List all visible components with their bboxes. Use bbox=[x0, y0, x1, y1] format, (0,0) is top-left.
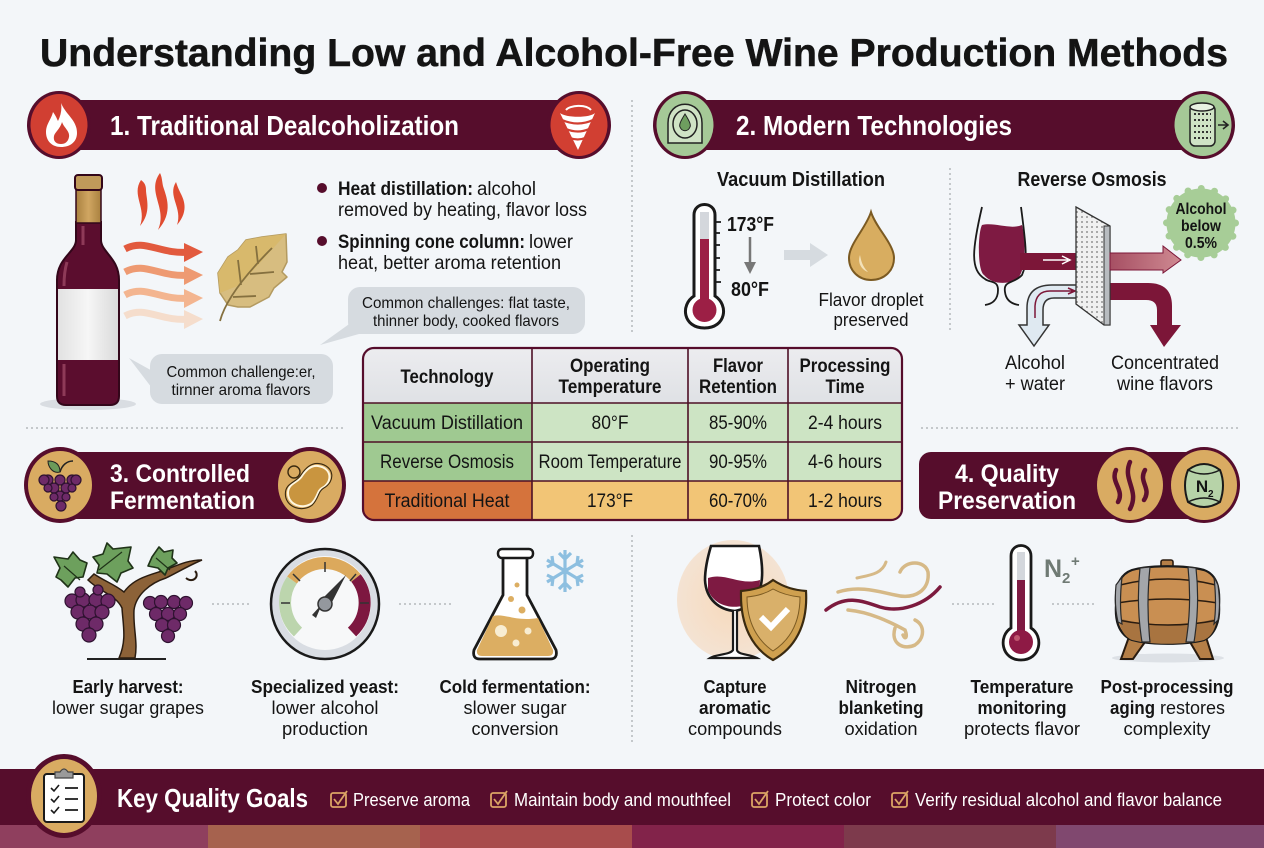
row: traditional heat: 1-2 hours bbox=[808, 491, 882, 512]
text: flavor droplet preserved: preserved bbox=[834, 310, 908, 330]
text: spinning cone column: Spinning cone column: bbox=[338, 232, 525, 253]
goal: protect color: Protect color bbox=[775, 790, 871, 810]
arrow: to droplet bbox=[784, 243, 828, 267]
text: specialized yeast: Specialized yeast: bbox=[251, 677, 399, 697]
text: specialized yeast: production bbox=[282, 719, 368, 739]
heading 3 banner bbox=[24, 447, 346, 523]
callout: common challenges: Common challenges: flat taste, bbox=[362, 295, 570, 312]
text: temperature monitoring: monitoring bbox=[978, 698, 1066, 718]
icon: nitrogen wind bbox=[826, 562, 940, 647]
icon: heat wave arrows bbox=[125, 243, 203, 329]
heading 3 banner: Fermentation bbox=[110, 487, 255, 515]
icon: flavor droplet bbox=[849, 212, 894, 280]
text: post-processing aging: restores bbox=[1160, 698, 1225, 718]
icon: thermometer 173 to 80: 80°F bbox=[731, 279, 769, 301]
arrow: concentrated wine flavors bbox=[1108, 283, 1181, 347]
arrow: wine into membrane bbox=[1020, 246, 1094, 275]
text: early harvest: lower sugar grapes bbox=[52, 698, 204, 718]
icon: temperature monitor: N bbox=[1044, 555, 1062, 583]
heading: vacuum distillation: Vacuum Distillation bbox=[717, 169, 885, 191]
badge: alcohol below 0.5% bbox=[1166, 188, 1236, 258]
text: flavor droplet preserved bbox=[818, 290, 924, 330]
text: nitrogen blanketing: blanketing bbox=[838, 698, 924, 718]
heading 4 banner bbox=[919, 447, 1240, 523]
text: nitrogen blanketing bbox=[838, 677, 924, 739]
icon: dry leaf bbox=[218, 234, 287, 321]
text: cold fermentation: Cold fermentation: bbox=[440, 677, 590, 697]
panel: traditional dealcoholization bbox=[27, 91, 611, 410]
callout: common challenges bbox=[320, 287, 585, 345]
row: vacuum distillation: Vacuum Distillation bbox=[371, 413, 523, 434]
heading 1 banner: 1. Traditional Dealcoholization bbox=[110, 110, 459, 141]
row: traditional heat: 60-70% bbox=[709, 491, 767, 512]
icon: fermentation flask bbox=[474, 549, 556, 659]
text: early harvest bbox=[52, 677, 204, 718]
text: post-processing aging: complexity bbox=[1124, 719, 1210, 739]
goal: preserve aroma: Preserve aroma bbox=[353, 790, 471, 810]
icon: clipboard bbox=[26, 754, 102, 838]
text: capture aromatic compounds: compounds bbox=[688, 719, 782, 739]
badge: alcohol below 0.5%: Alcohol bbox=[1176, 201, 1226, 218]
text: flavor droplet preserved: Flavor droplet bbox=[818, 290, 924, 310]
row: reverse osmosis: Room Temperature bbox=[538, 452, 682, 473]
text: concentrated wine flavors bbox=[1111, 353, 1219, 395]
text: spinning cone column: lower bbox=[529, 232, 574, 253]
panel: key quality goals bbox=[0, 754, 1264, 848]
icon: temperature monitor: + bbox=[1071, 553, 1080, 570]
heading 1 banner bbox=[27, 91, 611, 159]
heading 4 banner: 2 bbox=[1208, 489, 1214, 500]
text: temperature monitoring: Temperature bbox=[970, 677, 1074, 697]
text: spinning cone column: heat, better aroma retention bbox=[338, 253, 561, 274]
footer band bbox=[0, 769, 1264, 825]
row: reverse osmosis: 90-95% bbox=[709, 452, 767, 473]
panel: quality preservation bbox=[677, 447, 1240, 739]
badge: alcohol below 0.5%: 0.5% bbox=[1185, 235, 1217, 252]
heading 4 banner: Preservation bbox=[938, 487, 1076, 515]
title: Understanding Low and Alcohol-Free Wine Production Methods bbox=[40, 32, 1228, 75]
text: specialized yeast bbox=[251, 677, 399, 739]
goal: verify residual alcohol: Verify residual alcohol and flavor balance bbox=[915, 790, 1222, 810]
text: heat distillation bbox=[317, 179, 587, 221]
heading: key quality goals: Key Quality Goals bbox=[117, 783, 308, 813]
heading: reverse osmosis: Reverse Osmosis bbox=[1018, 169, 1166, 191]
badge: alcohol below 0.5%: below bbox=[1181, 218, 1221, 235]
table header: Technology bbox=[400, 367, 494, 388]
callout: common challenges: thinner body, cooked flavors bbox=[373, 313, 559, 330]
text: capture aromatic compounds: Capture bbox=[704, 677, 766, 697]
text: alcohol plus water: Alcohol bbox=[1005, 353, 1065, 374]
text: heat distillation: Heat distillation: bbox=[338, 179, 473, 200]
row: vacuum distillation: 2-4 hours bbox=[808, 413, 882, 434]
heading 2 banner: 2. Modern Technologies bbox=[736, 110, 1012, 141]
table header: Operating bbox=[570, 356, 650, 377]
table header: Retention bbox=[699, 377, 777, 398]
text: alcohol plus water: + water bbox=[1005, 374, 1066, 395]
arrow: alcohol and water bbox=[1019, 285, 1092, 346]
row: traditional heat bbox=[384, 491, 882, 512]
icon: wine glass bbox=[974, 207, 1026, 305]
text: spinning cone column bbox=[317, 232, 574, 274]
text: post-processing aging: aging bbox=[1110, 698, 1155, 718]
row: traditional heat: Traditional Heat bbox=[384, 491, 510, 512]
row: reverse osmosis bbox=[380, 452, 882, 473]
icon: wine bottle bbox=[40, 175, 136, 410]
icon: wine glass with shield bbox=[677, 540, 806, 660]
text: temperature monitoring bbox=[964, 677, 1080, 739]
text: temperature monitoring: protects flavor bbox=[964, 719, 1080, 739]
goal: maintain body and mouthfeel: Maintain body and mouthfeel bbox=[514, 790, 731, 810]
callout: bottle challenges bbox=[129, 354, 333, 404]
icon: grape vine bbox=[54, 543, 202, 659]
heading 4 banner: N bbox=[1196, 477, 1208, 496]
callout: bottle challenges: tirnner aroma flavors bbox=[172, 382, 310, 399]
text: cold fermentation bbox=[440, 677, 590, 739]
text: concentrated wine flavors: wine flavors bbox=[1116, 374, 1213, 395]
text: cold fermentation: slower sugar bbox=[464, 698, 566, 718]
panel: controlled fermentation bbox=[24, 447, 590, 739]
icon: temperature monitor: 2 bbox=[1062, 570, 1070, 587]
text: early harvest: Early harvest: bbox=[72, 677, 184, 697]
text: cold fermentation: conversion bbox=[472, 719, 558, 739]
icon: thermometer 173 to 80: 173°F bbox=[727, 214, 774, 236]
row: vacuum distillation: 85-90% bbox=[709, 413, 767, 434]
text: alcohol plus water bbox=[1005, 353, 1066, 395]
icon: thermometer 173 to 80 bbox=[685, 204, 774, 328]
comparison table bbox=[363, 348, 902, 520]
icon: membrane filter bbox=[1076, 207, 1110, 325]
text: nitrogen blanketing: Nitrogen bbox=[846, 677, 916, 697]
icon: fermentation gauge bbox=[271, 549, 379, 659]
panel: modern technologies bbox=[653, 91, 1236, 395]
footer colour strip bbox=[0, 825, 1264, 848]
text: capture aromatic compounds bbox=[688, 677, 782, 739]
table header: Processing bbox=[800, 356, 890, 377]
row: vacuum distillation bbox=[371, 413, 882, 434]
heading 3 banner: 3. Controlled bbox=[110, 460, 250, 488]
icon: rising heat bbox=[138, 173, 185, 230]
row: reverse osmosis: Reverse Osmosis bbox=[380, 452, 514, 473]
table header: Time bbox=[826, 377, 864, 398]
icon: oak barrel bbox=[1112, 560, 1224, 662]
heading 4 banner: 4. Quality bbox=[955, 460, 1059, 488]
row: reverse osmosis: 4-6 hours bbox=[808, 452, 882, 473]
table header bbox=[400, 356, 890, 398]
text: capture aromatic compounds: aromatic bbox=[699, 698, 771, 718]
text: heat distillation: removed by heating, flavor loss bbox=[338, 200, 587, 221]
text: specialized yeast: lower alcohol bbox=[272, 698, 378, 718]
icon: temperature monitor bbox=[1003, 546, 1080, 660]
row: traditional heat: 173°F bbox=[587, 491, 633, 512]
table header: Temperature bbox=[558, 377, 662, 398]
text: concentrated wine flavors: Concentrated bbox=[1111, 353, 1219, 374]
dividers bbox=[26, 100, 1238, 745]
text: nitrogen blanketing: oxidation bbox=[844, 719, 918, 739]
table header: Flavor bbox=[713, 356, 764, 377]
text: post-processing aging: Post-processing bbox=[1100, 677, 1234, 697]
arrow: permeate bbox=[1110, 246, 1181, 273]
text: post-processing aging bbox=[1100, 677, 1234, 739]
heading 2 banner bbox=[653, 91, 1235, 159]
row: vacuum distillation: 80°F bbox=[592, 413, 628, 434]
icon: snowflake bbox=[547, 550, 583, 592]
text: heat distillation: alcohol bbox=[477, 179, 536, 200]
callout: bottle challenges: Common challenge:er, bbox=[166, 364, 316, 381]
